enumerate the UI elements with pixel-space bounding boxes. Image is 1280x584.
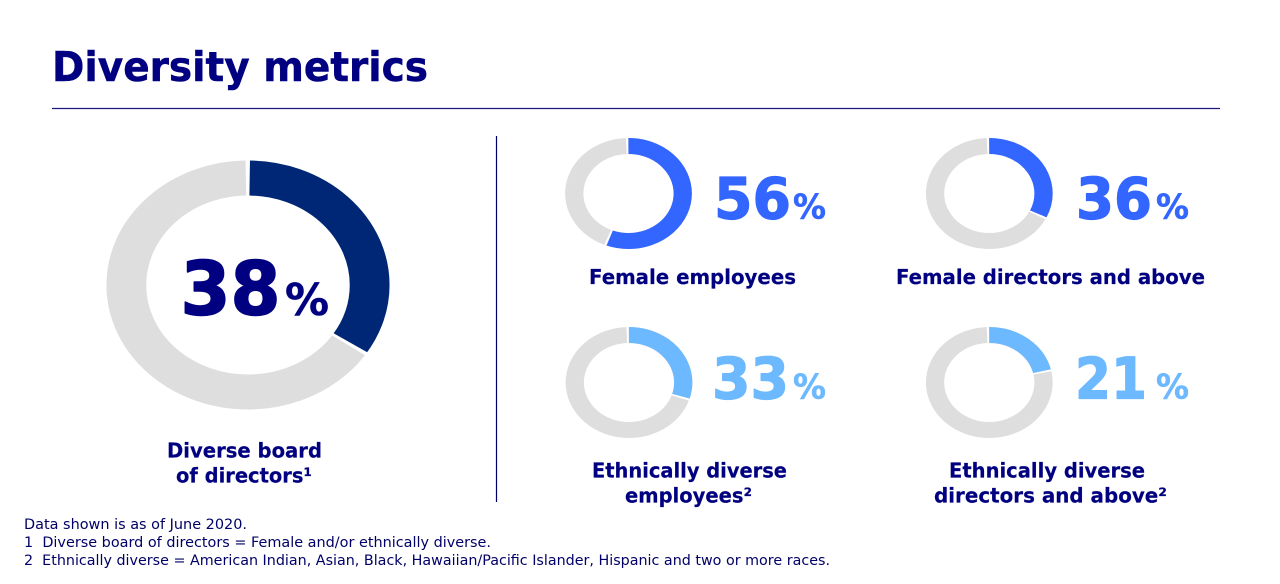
value: 36%: %	[1156, 188, 1189, 228]
label: diverse board of directors	[167, 438, 322, 488]
donut chart: 38%	[126, 178, 370, 392]
donut chart: 21%	[935, 335, 1044, 430]
label: ethnically diverse directors and above: Ethnically diverse	[949, 458, 1145, 482]
donut chart: 36%	[935, 146, 1044, 241]
label: ethnically diverse employees: Ethnically diverse	[592, 458, 787, 482]
panel: female directors and above	[896, 146, 1205, 289]
value: 33%: %	[793, 368, 826, 408]
label: diverse board of directors: Diverse board	[167, 438, 322, 462]
footnotes: 2 Ethnically diverse = American Indian, Asian, Black, Hawaiian/Pacific Islander, Hispanic and two or more races.	[24, 553, 830, 569]
value: 38%	[180, 246, 329, 332]
donut chart: 56%	[574, 146, 683, 241]
value: 38%: 38	[180, 246, 280, 332]
value: 33%	[712, 346, 826, 412]
value: 33%: 33	[712, 346, 789, 412]
footnotes	[24, 517, 830, 569]
value: 38%: %	[285, 275, 329, 326]
label: ethnically diverse directors and above: directors and above²	[934, 484, 1167, 508]
value: 56%: %	[793, 188, 826, 228]
value: 21%: %	[1156, 368, 1189, 408]
label: female directors and above: Female directors and above	[896, 265, 1205, 289]
label: ethnically diverse directors and above	[934, 458, 1167, 508]
value: 21%: 21	[1075, 346, 1147, 412]
panel: diverse board of directors	[126, 178, 370, 488]
label: diverse board of directors: of directors¹	[176, 464, 312, 488]
footnotes: 1 Diverse board of directors = Female and/or ethnically diverse.	[24, 535, 491, 551]
donut chart: 33%	[575, 335, 683, 430]
footnotes: Data shown is as of June 2020.	[24, 517, 247, 533]
label: ethnically diverse employees: employees²	[625, 484, 752, 508]
title: Diversity metrics	[52, 43, 428, 91]
value: 36%: 36	[1076, 166, 1152, 232]
label: female employees: Female employees	[589, 265, 796, 289]
label: ethnically diverse employees	[592, 458, 787, 508]
panel: female employees	[574, 146, 826, 289]
value: 56%: 56	[714, 166, 791, 232]
value: 21%	[1075, 346, 1189, 412]
panel: ethnically diverse employees	[575, 335, 826, 508]
panel: ethnically diverse directors and above	[934, 335, 1189, 508]
